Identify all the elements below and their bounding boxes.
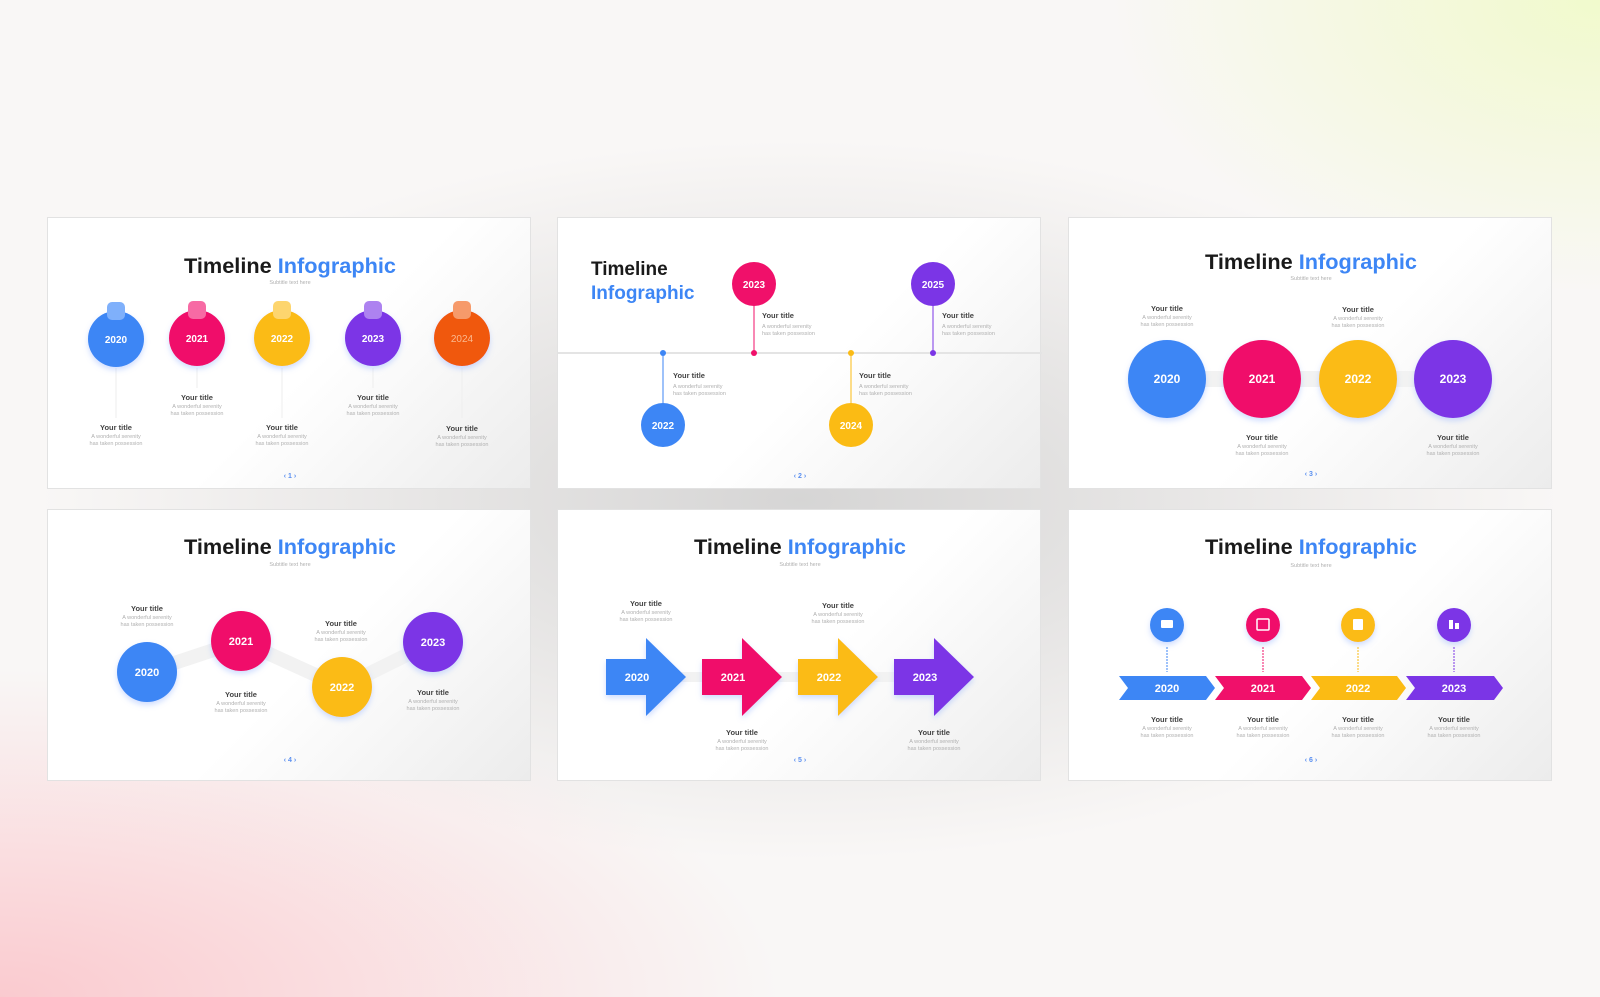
arrow 2022: has taken possession [812, 619, 864, 625]
milestone 2021: A wonderful serenity [1238, 726, 1288, 732]
milestone 2023: Your title [762, 311, 794, 320]
milestone 2022: has taken possession [673, 391, 726, 397]
arrow 2021 [702, 638, 782, 752]
title [591, 259, 695, 304]
arrow 2020: 2020 [625, 672, 649, 684]
milestone 2020: A wonderful serenity [91, 434, 141, 440]
milestone 2022: Your title [673, 371, 705, 380]
title: Timeline Infographic [1205, 536, 1417, 559]
milestone 2021: Your title [225, 690, 257, 699]
milestone 2024: 2024 [840, 421, 863, 432]
page number: ‹ 3 › [1305, 471, 1318, 478]
milestone 2021: A wonderful serenity [1237, 444, 1287, 450]
milestone 2020 [1128, 304, 1206, 418]
milestone 2024: A wonderful serenity [437, 435, 487, 441]
panel 5: arrows timeline [557, 509, 1041, 781]
milestone 2023: Your title [1438, 715, 1470, 724]
milestone 2023: has taken possession [1428, 733, 1480, 739]
milestone 2025: has taken possession [942, 331, 995, 337]
arrow 2021: has taken possession [716, 746, 768, 752]
milestone 2023 [1406, 608, 1503, 739]
milestone 2021: Your title [1247, 715, 1279, 724]
milestone 2021 [211, 611, 271, 714]
milestone 2022 [254, 301, 310, 447]
milestone 2022: 2022 [330, 682, 354, 694]
milestone 2023: 2023 [1442, 683, 1466, 695]
milestone 2023: Your title [417, 688, 449, 697]
milestone 2021 [169, 301, 225, 417]
arrow 2022: Your title [822, 601, 854, 610]
milestone 2020: has taken possession [1141, 733, 1193, 739]
milestone 2025: 2025 [922, 280, 945, 291]
milestone 2020: has taken possession [90, 441, 142, 447]
milestone 2020: has taken possession [121, 622, 173, 628]
milestone 2022: A wonderful serenity [316, 630, 366, 636]
milestone 2020: A wonderful serenity [122, 615, 172, 621]
milestone 2021: Your title [181, 393, 213, 402]
arrow 2021: A wonderful serenity [717, 739, 767, 745]
milestone 2022: Your title [325, 619, 357, 628]
milestone 2024: has taken possession [859, 391, 912, 397]
milestone 2023: Your title [357, 393, 389, 402]
title: Timeline Infographic [184, 255, 396, 278]
milestone 2024: has taken possession [436, 442, 488, 448]
milestone 2021: A wonderful serenity [216, 701, 266, 707]
page number: ‹ 5 › [794, 757, 807, 764]
milestone 2023 [1414, 340, 1492, 457]
title: Timeline Infographic [184, 536, 396, 559]
arrow 2021: 2021 [721, 672, 745, 684]
milestone 2024: A wonderful serenity [859, 384, 909, 390]
milestone 2022: Your title [1342, 305, 1374, 314]
milestone 2022: A wonderful serenity [257, 434, 307, 440]
arrow 2023: has taken possession [908, 746, 960, 752]
milestone 2025: Your title [942, 311, 974, 320]
milestone 2023: A wonderful serenity [762, 324, 812, 330]
milestone 2020: Your title [100, 423, 132, 432]
milestone 2022: 2022 [1345, 372, 1372, 386]
title: Infographic [591, 283, 695, 304]
arrow 2020: Your title [630, 599, 662, 608]
milestone 2020: 2020 [1155, 683, 1179, 695]
milestone 2023: A wonderful serenity [1428, 444, 1478, 450]
milestone 2021: 2021 [229, 636, 253, 648]
milestone 2021: has taken possession [1237, 733, 1289, 739]
milestone 2021: Your title [1246, 433, 1278, 442]
milestone 2023: 2023 [362, 334, 385, 345]
milestone 2020 [1119, 608, 1215, 739]
milestone 2020: A wonderful serenity [1142, 726, 1192, 732]
arrow 2021: Your title [726, 728, 758, 737]
arrow 2022 [798, 601, 878, 716]
title: Subtitle text here [269, 562, 311, 568]
milestone 2020 [88, 302, 144, 447]
milestone 2023: has taken possession [762, 331, 815, 337]
milestone 2022: has taken possession [256, 441, 308, 447]
milestone 2020: Your title [1151, 715, 1183, 724]
milestone 2023: 2023 [1440, 372, 1467, 386]
page number: ‹ 4 › [284, 757, 297, 764]
panel 3: big circles [1068, 217, 1552, 489]
milestone 2023 [732, 262, 815, 356]
milestone 2023: A wonderful serenity [1429, 726, 1479, 732]
milestone 2022: 2022 [652, 421, 675, 432]
page number: ‹ 6 › [1305, 757, 1318, 764]
milestone 2020 [117, 604, 177, 702]
milestone 2021: 2021 [1251, 683, 1275, 695]
milestone 2023 [403, 612, 463, 712]
milestone 2022 [641, 350, 726, 447]
panel 2: line timeline with stems [557, 217, 1041, 489]
milestone 2021: has taken possession [171, 411, 223, 417]
milestone 2024 [434, 301, 490, 448]
milestone 2023: has taken possession [407, 706, 459, 712]
title: Subtitle text here [269, 280, 311, 286]
milestone 2022: has taken possession [1332, 323, 1384, 329]
arrow 2023: A wonderful serenity [909, 739, 959, 745]
milestone 2022 [312, 619, 372, 717]
milestone 2023: A wonderful serenity [348, 404, 398, 410]
milestone 2022 [1311, 608, 1406, 739]
title: Timeline [591, 259, 668, 280]
milestone 2022 [1319, 305, 1397, 418]
milestone 2024: Your title [859, 371, 891, 380]
milestone 2023 [345, 301, 401, 417]
milestone 2022: A wonderful serenity [1333, 726, 1383, 732]
panel 4: zigzag circles [47, 509, 531, 781]
milestone 2021 [1223, 340, 1301, 457]
milestone 2021: 2021 [1249, 372, 1276, 386]
arrow 2023: 2023 [913, 672, 937, 684]
milestone 2021 [1215, 608, 1311, 739]
milestone 2025 [911, 262, 995, 356]
title: Subtitle text here [1290, 276, 1332, 282]
title: Subtitle text here [779, 562, 821, 568]
milestone 2022: 2022 [271, 334, 294, 345]
milestone 2022: A wonderful serenity [1333, 316, 1383, 322]
milestone 2024 [829, 350, 912, 447]
title: Timeline Infographic [1205, 251, 1417, 274]
milestone 2020: 2020 [135, 667, 159, 679]
milestone 2023: 2023 [421, 637, 445, 649]
milestone 2022: Your title [266, 423, 298, 432]
milestone 2020: Your title [1151, 304, 1183, 313]
page number: ‹ 1 › [284, 473, 297, 480]
milestone 2023: 2023 [743, 280, 766, 291]
milestone 2022: has taken possession [1332, 733, 1384, 739]
milestone 2022: Your title [1342, 715, 1374, 724]
milestone 2020: has taken possession [1141, 322, 1193, 328]
milestone 2020: Your title [131, 604, 163, 613]
milestone 2023: has taken possession [347, 411, 399, 417]
milestone 2024: 2024 [451, 334, 474, 345]
page number: ‹ 2 › [794, 473, 807, 480]
panel 6: chevron timeline with icons [1068, 509, 1552, 781]
arrow 2020: A wonderful serenity [621, 610, 671, 616]
milestone 2021: A wonderful serenity [172, 404, 222, 410]
milestone 2023: A wonderful serenity [408, 699, 458, 705]
title: Timeline Infographic [694, 536, 906, 559]
milestone 2022: has taken possession [315, 637, 367, 643]
arrow 2023: Your title [918, 728, 950, 737]
milestone 2024: Your title [446, 424, 478, 433]
milestone 2020: 2020 [105, 335, 128, 346]
milestone 2022: 2022 [1346, 683, 1370, 695]
milestone 2020: 2020 [1154, 372, 1181, 386]
milestone 2021: has taken possession [1236, 451, 1288, 457]
title: Subtitle text here [1290, 563, 1332, 569]
arrow 2020 [606, 599, 686, 716]
arrow 2020: has taken possession [620, 617, 672, 623]
milestone 2021: has taken possession [215, 708, 267, 714]
milestone 2025: A wonderful serenity [942, 324, 992, 330]
milestone 2021: 2021 [186, 334, 209, 345]
title [1205, 536, 1417, 569]
milestone 2022: A wonderful serenity [673, 384, 723, 390]
arrow 2023 [894, 638, 974, 752]
milestone 2023: has taken possession [1427, 451, 1479, 457]
panel 1: circles with icons timeline [47, 217, 531, 489]
milestone 2023: Your title [1437, 433, 1469, 442]
arrow 2022: A wonderful serenity [813, 612, 863, 618]
arrow 2022: 2022 [817, 672, 841, 684]
milestone 2020: A wonderful serenity [1142, 315, 1192, 321]
